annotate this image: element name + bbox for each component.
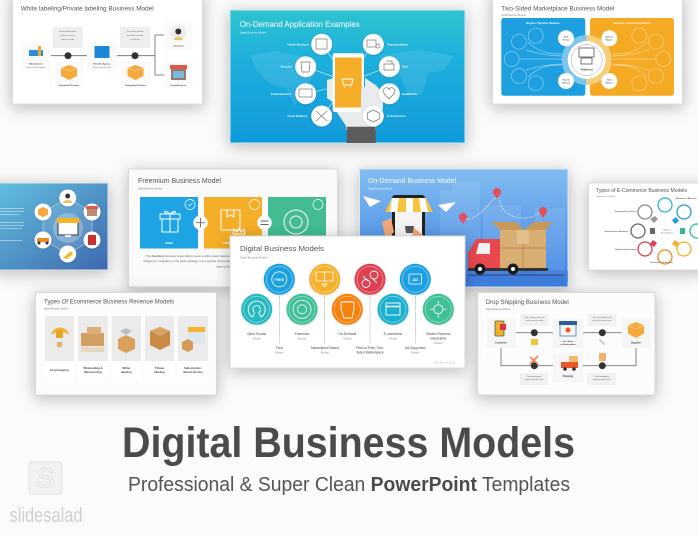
model circle: subscription	[309, 264, 340, 295]
note one: sold to a reseller	[61, 38, 75, 41]
subheading: Digital Business Models	[486, 308, 511, 311]
ring side labels: Consumer to Consumer	[650, 261, 673, 264]
card: marketplace	[553, 318, 583, 348]
hexagon icon glyphs	[37, 194, 98, 259]
intro text lines	[0, 208, 24, 241]
model circle: ad-supported: AD	[412, 277, 418, 282]
lower row labels: Peer-to-Peer, Two-	[356, 346, 384, 350]
buyers panel	[501, 18, 585, 96]
step icons	[530, 339, 606, 364]
satellite badge labels: Seek	[564, 36, 569, 38]
plus sign	[193, 216, 208, 230]
upper row sublabels: Model	[253, 336, 261, 340]
service icon glyphs	[299, 39, 395, 122]
freemium description: charges for "upgrades" to the basic package. It is a popular choice that	[143, 259, 231, 263]
freemium description: The freemium business model allows users to utilize basic features at no	[146, 254, 237, 258]
lower row sublabels: Model	[321, 350, 329, 354]
panel: two-sided marketplace slide	[492, 0, 682, 104]
card: manufacturer: White Label Supplier	[27, 66, 46, 69]
paper planes	[363, 196, 456, 212]
note two	[120, 27, 150, 48]
phone storefront	[382, 195, 433, 255]
skyline backdrop	[440, 182, 565, 275]
ring centre label	[661, 230, 674, 234]
card: local business: Local Business	[170, 85, 187, 87]
heading: white labeling: White labeling/Private labeling Business Model	[21, 6, 154, 13]
buyers panel: Buyers / Service Seekers	[526, 21, 560, 25]
step note text	[525, 316, 612, 381]
spokes	[306, 44, 389, 116]
card: subscription: Subscription-	[184, 366, 202, 370]
smartphone in hand	[327, 53, 383, 143]
ring side labels: Business to Business	[676, 197, 698, 200]
card: subscription	[178, 316, 208, 382]
card: marketplace: Your Store,	[562, 340, 574, 343]
satellite badge labels: Value to	[605, 36, 614, 38]
model circle: free	[264, 264, 295, 295]
ring side labels	[604, 197, 698, 264]
card: wholesaling	[78, 316, 108, 382]
step note text: supplier prepares your	[593, 379, 611, 381]
service labels: Entertainment	[271, 92, 291, 96]
step note text: order from your online	[526, 320, 543, 322]
premium card	[204, 197, 262, 248]
card: manufacturer: Manufacturer	[29, 62, 43, 66]
card: unbranded product: Unbranded Product	[59, 84, 79, 87]
card: supplier	[622, 318, 651, 348]
upper row sublabels: Model	[343, 336, 352, 340]
model circle: on-demand	[332, 294, 363, 325]
satellite badge labels	[562, 36, 614, 84]
world map backdrop	[250, 50, 454, 107]
service labels: Food Delivery	[288, 114, 308, 118]
lower row labels: Subscription Based	[310, 346, 339, 350]
subheading: Digital Business Models	[501, 14, 527, 17]
platform hub	[562, 35, 612, 85]
model circle: freemium	[286, 294, 318, 325]
note two: The reseller rebrands	[126, 31, 144, 33]
hexagon ring	[43, 198, 92, 254]
satellite badge labels: Service	[562, 40, 570, 42]
card: marketplace: or Marketplace	[560, 343, 576, 346]
service labels: Home Services	[287, 42, 309, 46]
freemium card	[268, 197, 326, 248]
step note text: Your customer places an	[525, 316, 544, 319]
upper row labels: Open Source	[247, 332, 267, 336]
note two: the product and sells	[127, 34, 143, 37]
heading: application examples: On-Demand Application Examples	[240, 20, 360, 29]
ring side labels: Citizen to Government	[615, 248, 636, 251]
service labels: Transportation	[387, 42, 408, 46]
subheading: Digital Business Models	[44, 308, 69, 310]
upper row labels: Hidden Revenue	[426, 332, 451, 336]
card: customer: Customer	[495, 342, 507, 344]
equals sign	[257, 216, 272, 230]
upper row labels: E-commerce	[384, 332, 403, 336]
premium card: PREMIUM	[223, 241, 238, 245]
flow connectors	[51, 35, 164, 75]
panel: on-demand application examples slide	[230, 10, 465, 143]
logo badge	[29, 462, 62, 494]
note two: it as its own	[130, 38, 140, 41]
card: wholesaling: Warehousing	[84, 370, 102, 374]
hexagon icons	[34, 190, 100, 262]
card: unbranded product	[55, 60, 83, 88]
card: white labeling	[112, 316, 141, 382]
service labels: Healthcare	[402, 92, 418, 96]
panel: digital business models main slide	[230, 236, 465, 368]
subheading: Digital Business Models	[138, 188, 163, 190]
step notes	[520, 314, 616, 385]
logo wordmark: slidesalad	[10, 505, 82, 527]
card: private labeling: labeling	[154, 370, 165, 374]
panel: drop shipping slide	[478, 292, 655, 395]
card: private labeling	[145, 316, 174, 382]
panel: white labeling slide	[12, 0, 202, 104]
service labels	[271, 42, 418, 118]
lower row labels: Ad-Supported	[405, 346, 426, 350]
dashed stems	[279, 296, 415, 343]
lower row sublabels: Model	[275, 350, 284, 354]
ring side labels: Government to Business	[604, 230, 629, 233]
platform hub: Platform	[581, 68, 593, 72]
heading: drop shipping: Drop Shipping Business Model	[486, 299, 569, 306]
step markers	[531, 329, 606, 369]
panel: types of e-commerce slide	[588, 183, 698, 270]
freemium description: users to their paid plans.	[216, 264, 247, 268]
subtitle: Professional & Super Clean PowerPoint Templates	[128, 474, 570, 496]
providers panel	[590, 18, 674, 96]
main title: Digital Business Models	[122, 419, 575, 467]
upper row labels	[247, 332, 451, 340]
card: private labeling: Private	[155, 366, 165, 370]
providers panel: Vendors / Service Providers	[614, 21, 651, 25]
card: rebranded product	[121, 60, 150, 88]
card: white labeling: White	[122, 366, 131, 370]
ring centre label: Types of	[663, 230, 671, 232]
model circle: e-commerce	[378, 294, 408, 325]
step note text: Your store automatically	[592, 316, 612, 319]
service icons	[295, 34, 400, 126]
heading: on-demand business model: On-Demand Business Model	[368, 178, 456, 185]
service labels: Taxi	[402, 64, 408, 68]
step note text: supplier ships the order	[525, 378, 544, 381]
satellite badge labels: Delivery	[562, 82, 571, 84]
upper row labels: Freemium	[295, 332, 310, 336]
note one	[53, 27, 83, 48]
panel: freemium slide	[128, 169, 338, 287]
card: supplier: Supplier	[631, 342, 641, 344]
lower row labels: Free	[276, 346, 283, 350]
heading: revenue models: Types Of Ecommerce Business Revenue Models	[44, 298, 175, 306]
card: customer: Consumer	[173, 46, 184, 48]
card: reseller: Reseller Agency	[94, 62, 111, 66]
lower row labels: Sided Marketplace	[356, 350, 384, 354]
flow connectors	[501, 333, 636, 366]
subheading: Digital Business Models	[596, 195, 615, 198]
card: white labeling: labeling	[121, 370, 132, 374]
ring diagram	[631, 198, 698, 264]
card: customer	[164, 22, 193, 50]
upper row labels: On-Demand	[338, 332, 356, 336]
card: local business	[164, 62, 193, 88]
upper row sublabels: Model	[389, 336, 397, 340]
card: shipping: Shipping	[563, 375, 574, 378]
upper row sublabels: Model	[434, 341, 443, 345]
card: reseller	[87, 42, 117, 70]
card: dropshipping: Dropshipping	[50, 368, 69, 372]
step markers	[64, 52, 138, 59]
logo badge: S	[36, 463, 55, 493]
satellite badge labels: Buyers	[606, 40, 614, 42]
panel: on-demand business model slide	[360, 169, 568, 287]
route with pins	[459, 188, 547, 224]
heading: e-commerce types: Types of E-Commerce Business Models	[596, 188, 688, 194]
lower row sublabels: Model	[411, 350, 420, 354]
card: customer	[487, 318, 516, 348]
ring centre label: E-Commerce	[661, 232, 674, 234]
step note text: Your dropshipping	[527, 376, 541, 378]
card: reseller: White Label Provider	[93, 66, 112, 69]
upper row labels: Generation	[430, 336, 447, 340]
card: manufacturer	[22, 42, 51, 70]
card: wholesaling: Wholesaling &	[83, 366, 103, 370]
step note text: Your dropshipping	[594, 376, 609, 378]
lower row sublabels	[275, 350, 420, 354]
note one: product or service	[61, 34, 75, 37]
satellite badge labels: Track &	[562, 80, 570, 82]
subheading: Digital Business Models	[240, 256, 268, 260]
model circle: peer-to-peer	[354, 264, 386, 295]
step note text: places the order to your	[593, 319, 612, 322]
slide watermark: slidesalad	[433, 360, 455, 365]
note one: A white label supplier	[59, 30, 77, 33]
model circle: free: FREE	[275, 278, 285, 282]
panel: partial e-commerce hexagon slide	[0, 183, 108, 270]
free card	[140, 197, 198, 248]
card: rebranded product: Rebranded Product	[125, 84, 146, 87]
ring connectors	[650, 216, 685, 247]
model circle: open source	[241, 294, 272, 325]
model circle: ad-supported	[400, 264, 431, 295]
satellite badge labels: Seek	[607, 80, 613, 82]
satellite badge labels: Buyers	[606, 82, 614, 84]
free card: FREE	[165, 241, 173, 245]
freemium description	[143, 254, 247, 268]
model circle: hidden revenue	[423, 294, 454, 325]
upper row sublabels	[253, 336, 443, 345]
card: shipping	[553, 353, 583, 382]
subheading: Digital Business Models	[240, 32, 267, 34]
heading: digital business models: Digital Business Models	[240, 244, 324, 253]
service labels: Grocery	[280, 64, 292, 68]
upper row sublabels: Model	[298, 336, 306, 340]
card: subscription: Based Service	[183, 370, 203, 374]
panel: ecommerce revenue models slide	[36, 292, 216, 395]
delivery truck	[360, 222, 568, 282]
satellite badges	[558, 30, 617, 89]
card: dropshipping	[45, 316, 74, 382]
heading: two-sided marketplace: Two-Sided Marketplace Business Model	[501, 6, 615, 13]
subheading: Digital Business Models	[368, 188, 393, 190]
lower row labels	[276, 346, 426, 354]
heading: freemium: Freemium Business Model	[138, 178, 221, 185]
ring side labels: Government to Citizen	[615, 210, 637, 213]
service labels: E-Commerce	[387, 114, 406, 118]
central storefront	[53, 213, 83, 243]
